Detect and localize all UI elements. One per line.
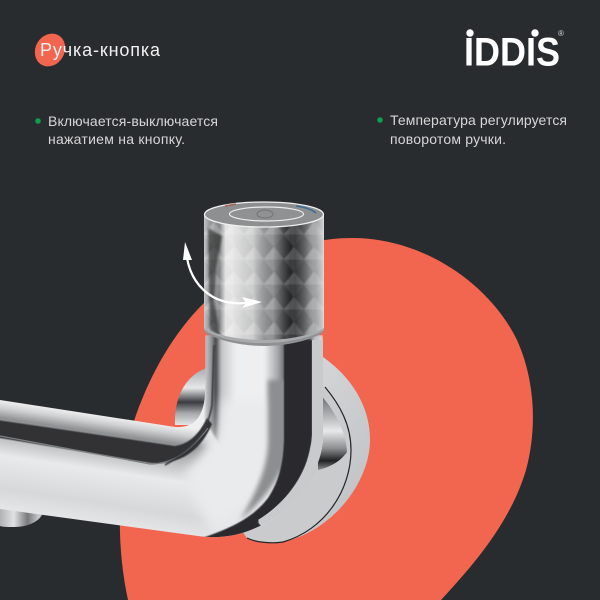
button ring	[230, 207, 304, 221]
spout lower highlight line	[0, 428, 208, 464]
spout base	[0, 380, 323, 538]
right feature note	[377, 112, 567, 147]
collar	[205, 326, 323, 346]
dark reflection band	[195, 340, 312, 540]
logo: iDDiS	[464, 29, 564, 74]
registered mark: ®	[558, 29, 564, 38]
right note text: Температура регулируется	[390, 112, 567, 128]
vertical body	[205, 335, 323, 470]
inner contour line	[165, 345, 214, 465]
elbow highlight	[186, 396, 232, 474]
title accent blob	[29, 28, 71, 72]
coral blob background	[120, 238, 533, 600]
faceted knob	[204, 210, 324, 345]
green bullet	[35, 118, 41, 124]
spout dark band	[0, 416, 212, 463]
grey shoulder	[240, 380, 290, 520]
arrowhead right	[242, 297, 262, 308]
outer rim	[258, 340, 323, 525]
power symbol	[257, 210, 273, 218]
threaded outlet	[0, 505, 46, 527]
knob reflection strip	[208, 228, 222, 336]
temperature marks	[296, 206, 316, 213]
spout and elbow	[0, 335, 323, 538]
title with coral accent	[29, 28, 161, 72]
rear connector ring	[175, 368, 215, 425]
title text: Ручка-кнопка	[40, 40, 161, 60]
wall flange	[220, 355, 370, 543]
faucet	[0, 202, 370, 550]
green bullet	[377, 117, 383, 123]
arrowhead up	[183, 242, 192, 260]
left note text: Включается-выключается	[48, 113, 218, 129]
rotation arrow	[183, 242, 262, 308]
right note text: поворотом ручки.	[390, 131, 506, 147]
knob shading	[209, 220, 324, 341]
left note text: нажатием на кнопку.	[48, 131, 185, 147]
logo dots	[466, 29, 539, 37]
logo word: IDDIS	[464, 30, 560, 74]
knob bottom band	[204, 328, 324, 343]
elbow light blend	[193, 439, 280, 538]
knob top cap	[204, 202, 324, 227]
left feature note	[35, 113, 218, 147]
